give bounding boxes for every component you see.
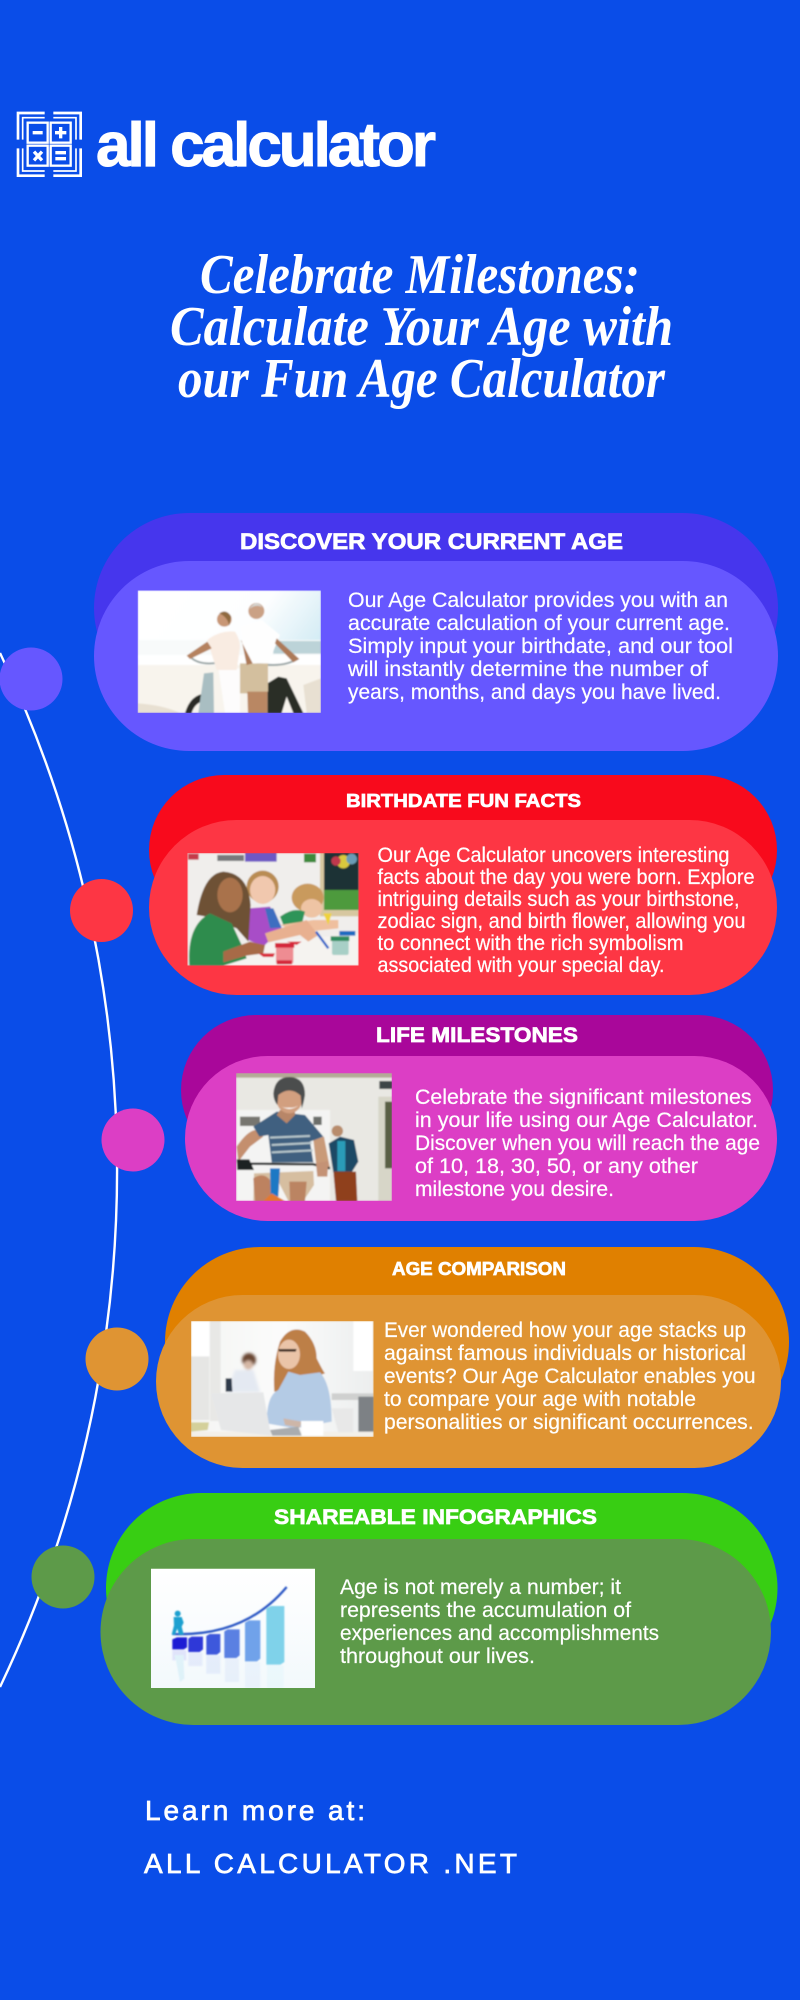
body text bbox=[378, 844, 754, 977]
rising arrow curve bbox=[172, 1587, 287, 1634]
title: Calculate Your Age with bbox=[170, 296, 673, 358]
bikes bbox=[184, 694, 202, 713]
photo: woman at a laptop bbox=[191, 1321, 374, 1437]
body text: Ever wondered how your age stacks up bbox=[384, 1318, 746, 1342]
body text: against famous individuals or historical bbox=[384, 1341, 746, 1365]
body text: will instantly determine the number of bbox=[347, 657, 708, 681]
body text: Discover when you will reach the age bbox=[415, 1131, 760, 1155]
heading: AGE COMPARISON bbox=[392, 1258, 566, 1279]
body text: throughout our lives. bbox=[340, 1644, 535, 1668]
timeline curve bbox=[0, 653, 117, 1687]
woman bbox=[274, 1329, 325, 1392]
title: our Fun Age Calculator bbox=[178, 348, 666, 410]
body text: Our Age Calculator uncovers interesting bbox=[378, 844, 730, 867]
chart image: rising blue bars with a walking figure bbox=[151, 1569, 315, 1688]
body text: associated with your special day. bbox=[378, 954, 664, 977]
boy bbox=[237, 1130, 263, 1162]
third child bbox=[292, 884, 324, 912]
logo bbox=[18, 111, 436, 180]
panel: life milestones bbox=[181, 1015, 777, 1221]
heading: BIRTHDATE FUN FACTS bbox=[346, 790, 581, 811]
photo: children painting bbox=[187, 853, 359, 966]
body text: Celebrate the significant milestones bbox=[415, 1085, 752, 1109]
heading: LIFE MILESTONES bbox=[376, 1023, 578, 1047]
girl bbox=[197, 872, 251, 942]
title: Celebrate Milestones: bbox=[200, 244, 640, 306]
body text: personalities or significant occurrences. bbox=[384, 1410, 754, 1434]
panel: discover your current age bbox=[94, 513, 778, 751]
icon: calculator bbox=[18, 113, 81, 176]
body text: experiences and accomplishments bbox=[340, 1621, 659, 1645]
heading: DISCOVER YOUR CURRENT AGE bbox=[240, 529, 623, 554]
panel: birthdate fun facts bbox=[149, 775, 777, 995]
figure bbox=[175, 1611, 181, 1617]
background man bbox=[232, 1350, 260, 1392]
body text: facts about the day you were born. Explore bbox=[378, 866, 754, 889]
second child bbox=[247, 871, 279, 903]
table bbox=[220, 933, 359, 966]
body text: accurate calculation of your current age. bbox=[348, 611, 730, 635]
body text: zodiac sign, and birth flower, allowing you bbox=[378, 910, 746, 933]
body text: milestone you desire. bbox=[415, 1177, 614, 1201]
man bbox=[240, 663, 268, 693]
woman bbox=[218, 668, 240, 713]
body text: in your life using our Age Calculator. bbox=[415, 1108, 758, 1132]
reflections bbox=[172, 1650, 284, 1688]
panel: age comparison bbox=[156, 1247, 789, 1468]
body text bbox=[347, 588, 733, 704]
body text: Our Age Calculator provides you with an bbox=[348, 588, 728, 612]
body text bbox=[340, 1575, 659, 1668]
body text: represents the accumulation of bbox=[340, 1598, 631, 1622]
bars bbox=[172, 1637, 187, 1649]
laptop bbox=[219, 1392, 270, 1435]
photo: couple with bicycles on a beach bbox=[138, 590, 321, 713]
body text: Simply input your birthdate, and our tool bbox=[348, 634, 733, 658]
footer call to action: Learn more at: bbox=[145, 1795, 365, 1826]
man bbox=[332, 1125, 343, 1137]
body text: intriguing details such as your birthstone, bbox=[378, 888, 740, 911]
body text: to compare your age with notable bbox=[384, 1387, 696, 1411]
body text: years, months, and days you have lived. bbox=[348, 680, 721, 704]
footer call to action: ALL CALCULATOR .NET bbox=[144, 1848, 517, 1879]
footer call to action bbox=[144, 1795, 517, 1879]
panel: shareable infographics bbox=[100, 1493, 778, 1725]
timeline dots bbox=[0, 648, 164, 1608]
logo wordmark: all calculator bbox=[96, 111, 436, 180]
title bbox=[170, 244, 673, 410]
heading: SHAREABLE INFOGRAPHICS bbox=[274, 1505, 597, 1529]
body text: of 10, 18, 30, 50, or any other bbox=[415, 1154, 698, 1178]
body text bbox=[415, 1085, 760, 1201]
body text: to connect with the rich symbolism bbox=[378, 932, 684, 955]
body text: Age is not merely a number; it bbox=[340, 1575, 621, 1599]
body text: events? Our Age Calculator enables you bbox=[384, 1364, 756, 1388]
mug and book bbox=[301, 1421, 323, 1436]
body text bbox=[384, 1318, 756, 1434]
photo: boy on a bike bbox=[236, 1073, 392, 1201]
cups bbox=[276, 944, 293, 964]
